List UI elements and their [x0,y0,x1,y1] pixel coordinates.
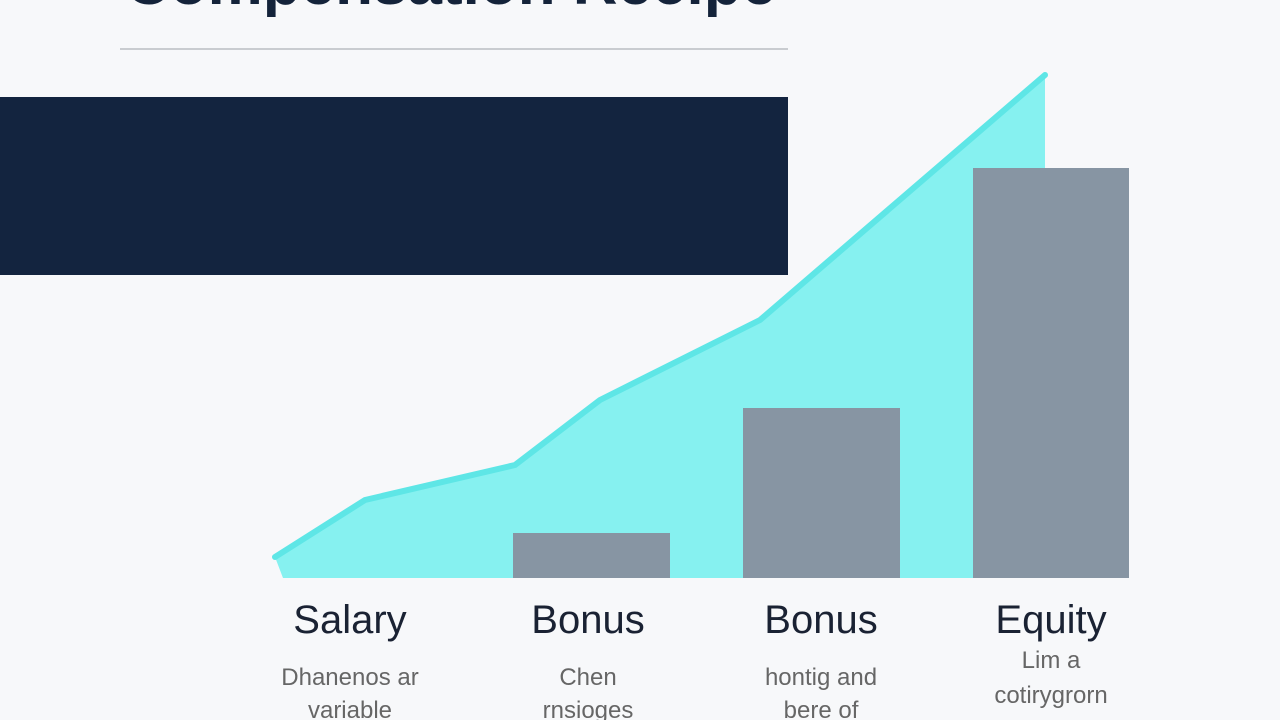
bar chart [513,168,1129,578]
label: bonus 1 [531,598,645,720]
label: bonus 2 [764,598,878,720]
label: bonus 2: hontig and [765,664,877,691]
label: bonus 2: Bonus [764,598,878,642]
label: salary [281,598,419,720]
label: bonus 1: Bonus [531,598,645,642]
label: bonus 1: Chen [559,664,617,691]
label: salary: Salary [293,598,407,642]
label: equity: Equity [995,598,1107,642]
dark banner [0,97,788,275]
label: salary: Dhanenos ar [281,664,419,691]
label: equity: cotirygrorn [994,682,1108,709]
label: equity [994,598,1108,709]
area chart [275,75,1045,578]
label: equity: Lim a [1022,647,1081,674]
